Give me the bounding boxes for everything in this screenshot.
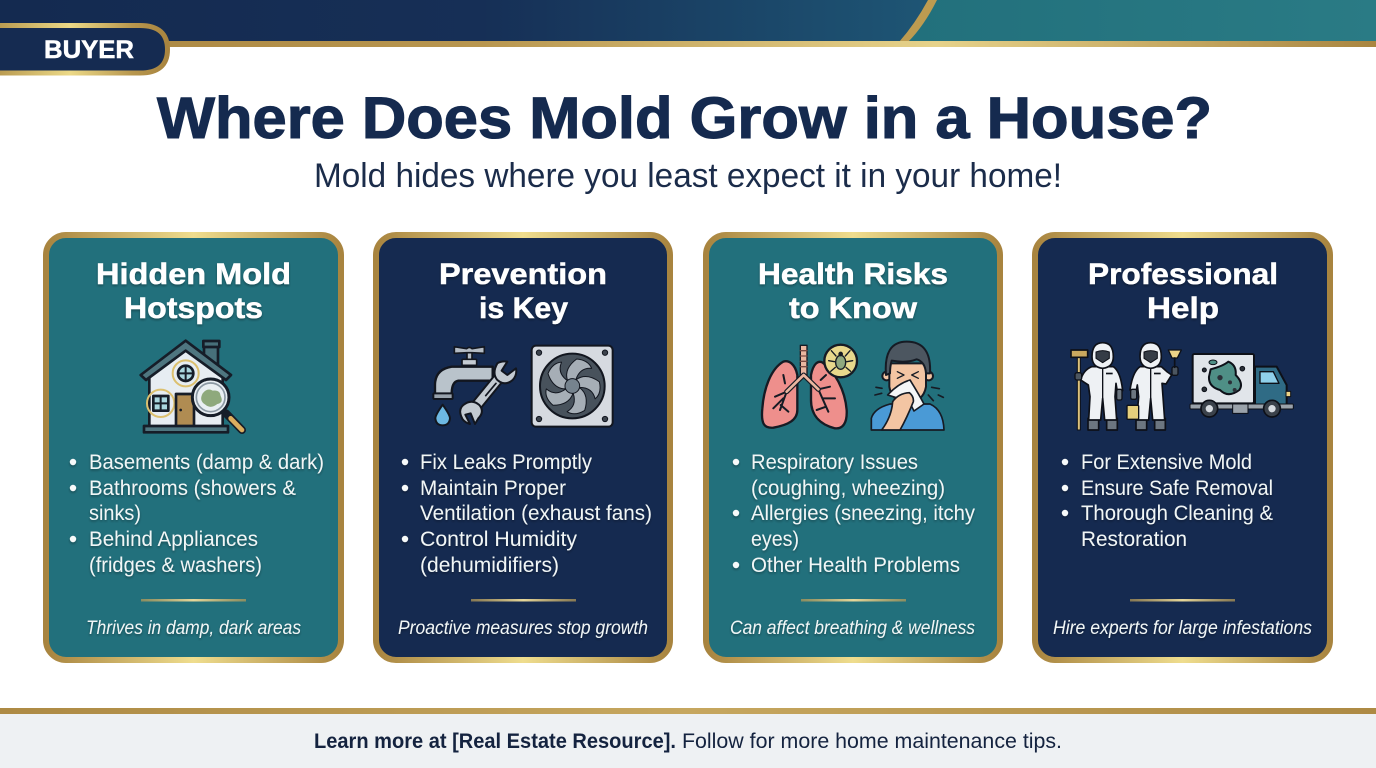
list: health (733, 450, 975, 577)
heading: prevention is key (439, 258, 607, 325)
heading: hidden mold hotspots (96, 258, 291, 325)
list: health: Other Health Problems (751, 553, 960, 577)
note: proactive: Proactive measures stop growth (398, 617, 648, 639)
list: hotspots: Basements (damp & dark) (89, 450, 324, 474)
list: health: Respiratory Issues (751, 450, 918, 474)
badge: buyer (0, 26, 168, 73)
note: breathing: Can affect breathing & wellness (730, 617, 975, 639)
panel: health risks to know (706, 235, 1000, 660)
list: professional (1062, 450, 1273, 551)
list: hotspots: Bathrooms (showers & (89, 476, 296, 500)
heading: health risks: to Know (789, 292, 918, 325)
footer bar (0, 708, 1376, 768)
list: hotspots (70, 450, 324, 577)
list: prevention: Fix Leaks Promptly (420, 450, 592, 474)
heading: hidden mold hotspots: Hotspots (124, 292, 263, 325)
badge: buyer: BUYER (44, 36, 134, 64)
list: hotspots: (fridges & washers) (89, 553, 262, 577)
list: professional: Ensure Safe Removal (1081, 476, 1273, 500)
heading: professional help (1088, 258, 1278, 325)
list: hotspots: Behind Appliances (89, 527, 258, 551)
list: hotspots: sinks) (89, 501, 141, 525)
list: health: (coughing, wheezing) (751, 476, 945, 500)
heading: prevention is key: is Key (479, 292, 568, 325)
heading: professional help: Help (1147, 292, 1219, 325)
icon: hazmat workers and truck (1071, 343, 1293, 430)
note: hire experts: Hire experts for large infestations (1053, 617, 1312, 639)
footer text (314, 730, 1062, 753)
note: thrives: Thrives in damp, dark areas (86, 617, 301, 639)
heading: professional help: Professional (1088, 258, 1278, 291)
heading: health risks (758, 258, 948, 325)
panel: prevention is key (376, 235, 670, 660)
list: health: Allergies (sneezing, itchy (751, 501, 975, 525)
list: professional: Thorough Cleaning & (1081, 501, 1273, 525)
list: prevention: (dehumidifiers) (420, 553, 559, 577)
list: health: eyes) (751, 527, 799, 551)
list: prevention: Control Humidity (420, 527, 577, 551)
panel: hidden mold hotspots (46, 235, 341, 660)
panel: professional help (1035, 235, 1330, 660)
title: Where Does Mold Grow in a House? (157, 86, 1212, 151)
icon: faucet and wrench (433, 346, 613, 427)
footer text: Learn more at [Real Estate Resource]. (314, 730, 676, 753)
header banner (0, 0, 1376, 47)
icon: lungs and sneezing person (762, 342, 944, 430)
heading: health risks: Health Risks (758, 258, 948, 291)
heading: hidden mold hotspots: Hidden Mold (96, 258, 291, 291)
list: prevention: Maintain Proper (420, 476, 566, 500)
subtitle: Mold hides where you least expect it in your home! (314, 157, 1062, 195)
list: prevention: Ventilation (exhaust fans) (420, 501, 652, 525)
list: professional: For Extensive Mold (1081, 450, 1252, 474)
list: prevention (402, 450, 652, 577)
icon: house with magnifier (141, 341, 242, 432)
heading: prevention is key: Prevention (439, 258, 607, 291)
list: professional: Restoration (1081, 527, 1187, 551)
footer text: Follow for more home maintenance tips. (682, 730, 1062, 753)
